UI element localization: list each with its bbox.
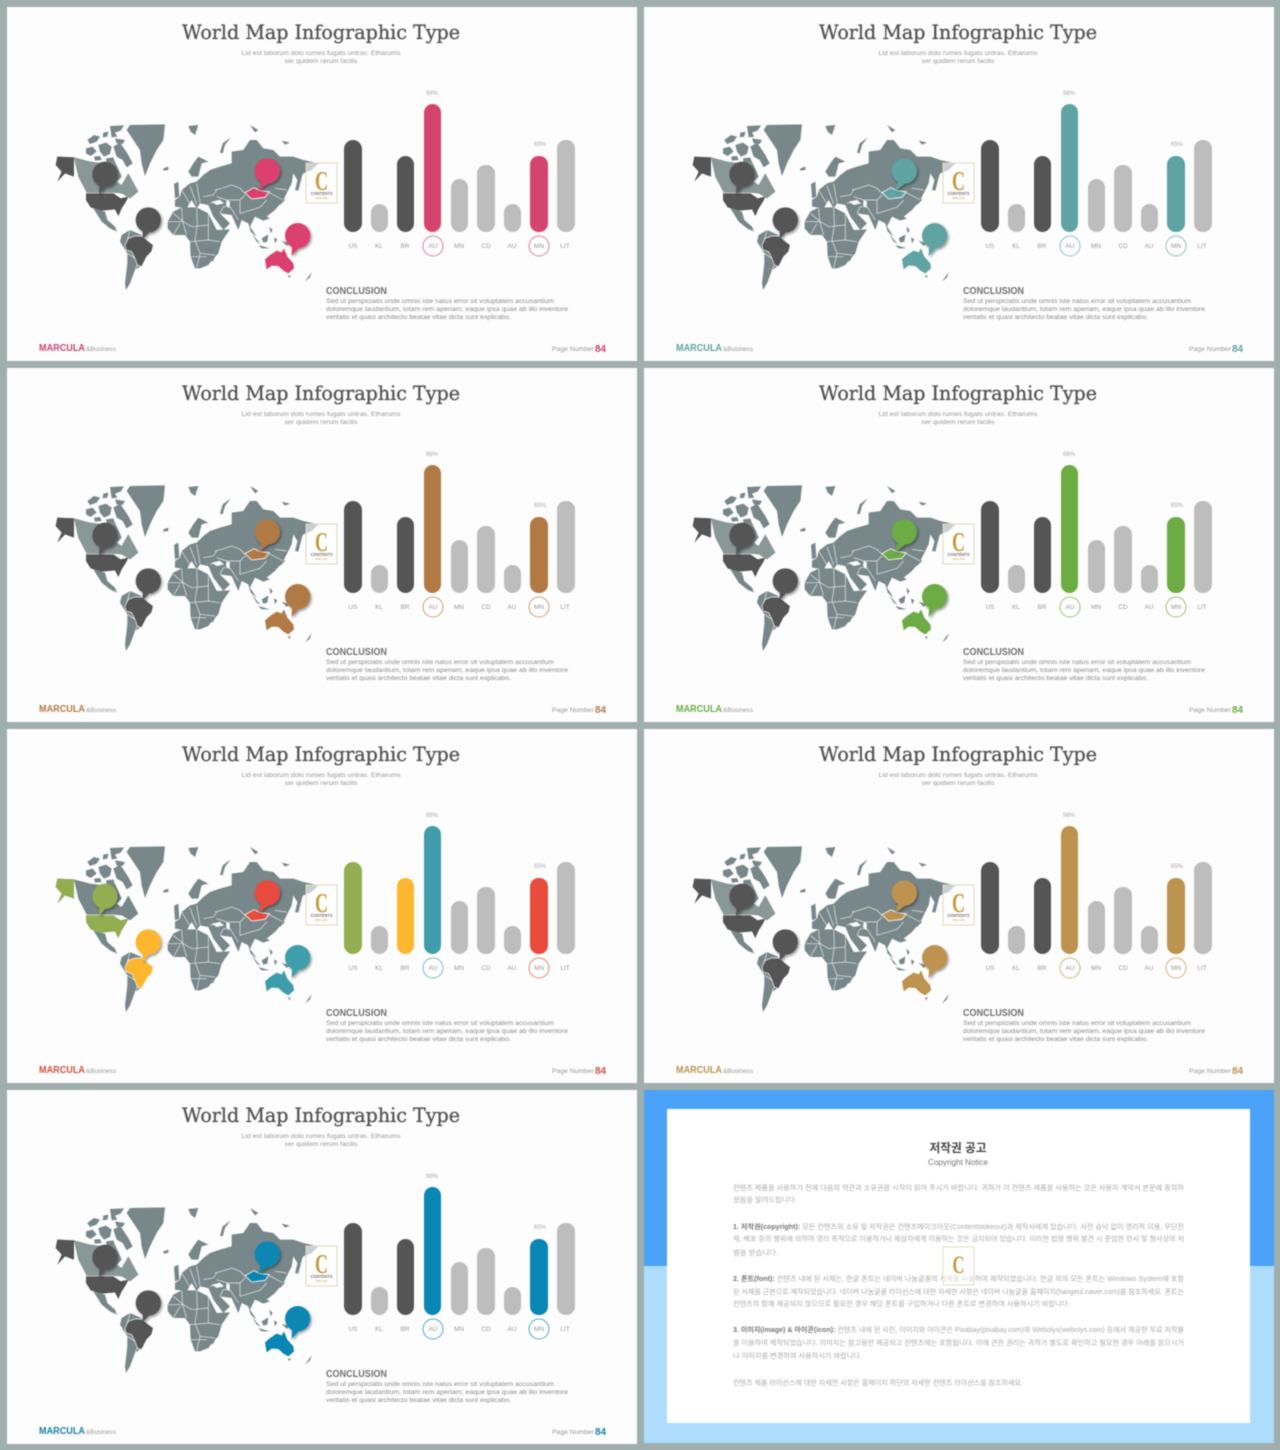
bar chart: CD xyxy=(481,965,491,972)
footer brand: &Business xyxy=(723,708,753,714)
footer brand: &Business xyxy=(86,1430,116,1436)
bar chart xyxy=(344,452,575,617)
bar chart: 98% xyxy=(426,813,439,819)
title: World Map Infographic Type xyxy=(182,381,460,405)
bar chart: AU xyxy=(1066,965,1075,972)
subtitle: ser quidem rerum facilis xyxy=(284,780,358,787)
bar chart: US xyxy=(349,965,357,972)
subtitle: ser quidem rerum facilis xyxy=(922,419,994,426)
bar chart xyxy=(344,91,575,256)
logo watermark xyxy=(943,163,974,203)
footer brand xyxy=(39,704,116,715)
bar chart: US xyxy=(986,965,994,972)
panel: pink slide xyxy=(7,7,637,361)
panel: copyright notice xyxy=(644,1090,1274,1443)
page number: 84 xyxy=(595,1427,607,1438)
bar chart xyxy=(344,1174,575,1339)
page number: 84 xyxy=(1232,1066,1244,1077)
footer brand: &Business xyxy=(86,1069,116,1075)
bar chart: US xyxy=(986,243,994,250)
conclusion: doloremque laudantium, totam rem aperiam, eaque ipsa quae ab illo inventore xyxy=(326,306,568,313)
title: World Map Infographic Type xyxy=(182,1103,460,1127)
bar chart: BR xyxy=(401,243,410,250)
subtitle: ser quidem rerum facilis xyxy=(922,780,994,787)
bar chart: CD xyxy=(481,243,491,250)
title: World Map Infographic Type xyxy=(819,381,1097,405)
subtitle: ser quidem rerum facilis xyxy=(284,1141,358,1148)
subtitle: ser quidem rerum facilis xyxy=(284,58,358,65)
conclusion xyxy=(326,286,568,321)
bar chart: AU xyxy=(508,1326,517,1333)
logo watermark xyxy=(943,1247,974,1285)
conclusion: Sed ut perspiciatis unde omnis iste natus error sit voluptatem accusantium xyxy=(963,298,1192,305)
copyright body text: 된 서체를 근본으로 제작되었습니다. 네이버 나눔글꼴 라이선스에 대한 자세한 사항은 네이버 나눔글꼴 홈페이지(hangeul.naver.com)를 참조하세요. 폰트는 xyxy=(733,1287,1185,1296)
conclusion: Sed ut perspiciatis unde omnis iste natus error sit voluptatem accusantium xyxy=(963,659,1192,666)
copyright body text: 셨음을 알려드립니다. xyxy=(733,1195,797,1204)
bar chart: MN xyxy=(1091,965,1101,972)
subtitle: Lid est laborum dolo rumes fugats untras. Etharums xyxy=(878,772,1038,779)
conclusion xyxy=(326,1369,568,1404)
page number: 84 xyxy=(595,344,607,355)
bar chart xyxy=(981,813,1212,978)
conclusion: veritatis et quasi architecto beatae vitae dicta sunt explicabo. xyxy=(326,314,511,321)
footer brand: MARCULA xyxy=(676,1065,722,1076)
conclusion: doloremque laudantium, totam rem aperiam, eaque ipsa quae ab illo inventore xyxy=(326,1028,568,1035)
bar chart: 98% xyxy=(1063,813,1076,819)
title: World Map Infographic Type xyxy=(819,742,1097,766)
conclusion: CONCLUSION xyxy=(963,286,1024,297)
copyright body text xyxy=(733,1183,1185,1387)
bar chart: 98% xyxy=(426,452,439,458)
bar chart: AU xyxy=(1145,604,1154,611)
bar chart: 65% xyxy=(1171,864,1184,870)
footer brand xyxy=(39,1065,116,1076)
subtitle xyxy=(878,50,1038,65)
bar chart: MN xyxy=(454,1326,464,1333)
panel: teal slide xyxy=(644,7,1274,361)
bar chart: KL xyxy=(1012,604,1020,611)
conclusion: Sed ut perspiciatis unde omnis iste natus error sit voluptatem accusantium xyxy=(963,1020,1192,1027)
panel: brown slide xyxy=(7,368,637,722)
page number: Page Number xyxy=(552,708,594,714)
world map xyxy=(56,485,318,651)
panel: multicolor slide xyxy=(7,729,637,1083)
copyright body text: 벌을 받습니다. xyxy=(733,1248,778,1257)
conclusion: doloremque laudantium, totam rem aperiam, eaque ipsa quae ab illo inventore xyxy=(963,306,1205,313)
bar chart: AU xyxy=(1066,604,1075,611)
page number xyxy=(1189,344,1244,355)
footer brand: &Business xyxy=(86,347,116,353)
bar chart: 65% xyxy=(534,1225,547,1231)
bar chart: AU xyxy=(429,1326,438,1333)
page number xyxy=(1189,1066,1244,1077)
conclusion xyxy=(963,647,1205,682)
footer brand xyxy=(676,1065,753,1076)
page number: 84 xyxy=(1232,705,1244,716)
bar chart: US xyxy=(349,243,357,250)
bar chart: US xyxy=(986,604,994,611)
panel: tan slide xyxy=(644,729,1274,1083)
bar chart: BR xyxy=(401,1326,410,1333)
conclusion xyxy=(326,1008,568,1043)
copyright body text: 1. 저작권(copyright): 모든 컨텐츠의 소유 및 저작권은 컨텐츠메이크아웃(Contentstokeout)과 제작사에게 있습니다. 사전 승낙 없이 영리적 이용, 무단전 xyxy=(733,1222,1184,1231)
conclusion xyxy=(963,1008,1205,1043)
subtitle: Lid est laborum dolo rumes fugats untras. Etharums xyxy=(242,772,400,779)
subtitle xyxy=(242,411,400,426)
bar chart: KL xyxy=(375,604,383,611)
world map xyxy=(56,124,318,290)
panel: blue slide xyxy=(7,1090,637,1444)
logo watermark xyxy=(306,524,337,564)
conclusion: veritatis et quasi architecto beatae vitae dicta sunt explicabo. xyxy=(326,1036,511,1043)
bar chart: US xyxy=(349,1326,357,1333)
page number: Page Number xyxy=(552,347,594,353)
bar chart: 98% xyxy=(426,1174,439,1180)
world map xyxy=(56,1207,318,1373)
bar chart: 65% xyxy=(534,142,547,148)
bar chart: 65% xyxy=(534,503,547,509)
bar chart: BR xyxy=(1038,604,1047,611)
subtitle xyxy=(878,772,1038,787)
bar chart: CD xyxy=(481,604,491,611)
bar chart: CD xyxy=(481,1326,491,1333)
copyright heading: 저작권 공고 xyxy=(930,1140,986,1155)
bar chart: CD xyxy=(1118,604,1128,611)
footer brand xyxy=(676,704,753,715)
bar chart: MN xyxy=(454,965,464,972)
logo watermark: C xyxy=(952,1252,964,1279)
conclusion: Sed ut perspiciatis unde omnis iste natus error sit voluptatem accusantium xyxy=(326,1020,555,1027)
subtitle: Lid est laborum dolo rumes fugats untras. Etharums xyxy=(242,1133,400,1140)
footer brand: &Business xyxy=(86,708,116,714)
bar chart: MN xyxy=(454,243,464,250)
bar chart: MN xyxy=(1091,604,1101,611)
bar chart: KL xyxy=(1012,965,1020,972)
bar chart: KL xyxy=(375,1326,383,1333)
subtitle: ser quidem rerum facilis xyxy=(284,419,358,426)
bar chart: KL xyxy=(375,965,383,972)
bar chart: MN xyxy=(534,243,544,250)
conclusion: doloremque laudantium, totam rem aperiam, eaque ipsa quae ab illo inventore xyxy=(963,1028,1205,1035)
conclusion xyxy=(326,647,568,682)
bar chart: MN xyxy=(1091,243,1101,250)
page number: Page Number xyxy=(552,1069,594,1075)
bar chart: LIT xyxy=(1197,243,1207,250)
bar chart: LIT xyxy=(560,965,570,972)
copyright body text: 3. 이미지(image) & 아이콘(icon): 컨텐츠 내에 된 사진, 이미지와 아이콘은 Pixabay(pixabay.com)와 Webolys(webolys.com) 등에서 제공한 무료 저작물 xyxy=(733,1325,1185,1334)
title: World Map Infographic Type xyxy=(819,20,1097,44)
bar chart: AU xyxy=(508,243,517,250)
bar chart: KL xyxy=(1012,243,1020,250)
conclusion: Sed ut perspiciatis unde omnis iste natus error sit voluptatem accusantium xyxy=(326,659,555,666)
bar chart xyxy=(981,452,1212,617)
page number: Page Number xyxy=(1189,1069,1231,1075)
bar chart: MN xyxy=(534,1326,544,1333)
bar chart: BR xyxy=(401,604,410,611)
logo watermark xyxy=(943,885,974,925)
bar chart: MN xyxy=(534,604,544,611)
bar chart: MN xyxy=(534,965,544,972)
footer brand: MARCULA xyxy=(39,343,85,354)
conclusion: CONCLUSION xyxy=(326,1008,387,1019)
bar chart: AU xyxy=(1145,243,1154,250)
conclusion: Sed ut perspiciatis unde omnis iste natus error sit voluptatem accusantium xyxy=(326,298,555,305)
footer brand: &Business xyxy=(723,347,753,353)
bar chart: LIT xyxy=(1197,604,1207,611)
bar chart: CD xyxy=(1118,243,1128,250)
subtitle: Lid est laborum dolo rumes fugats untras. Etharums xyxy=(878,411,1038,418)
conclusion: CONCLUSION xyxy=(326,647,387,658)
copyright body text: 나 이미지를 변경하여 사용하시기 바랍니다. xyxy=(733,1351,862,1360)
copyright body text: 컨텐츠의 함께 제공되지 않으므로 필요한 경우 해당 폰트를 구입하거나 다른 폰트로 변경하여 사용하시기 바랍니다. xyxy=(733,1299,1070,1308)
panel: green slide xyxy=(644,368,1274,722)
page number xyxy=(552,1427,607,1438)
conclusion: CONCLUSION xyxy=(326,1369,387,1380)
conclusion: veritatis et quasi architecto beatae vitae dicta sunt explicabo. xyxy=(326,1397,511,1404)
bar chart: 65% xyxy=(534,864,547,870)
footer brand xyxy=(39,343,116,354)
subtitle: Lid est laborum dolo rumes fugats untras. Etharums xyxy=(242,50,400,57)
copyright subheading: Copyright Notice xyxy=(928,1158,989,1167)
footer brand xyxy=(39,1426,116,1437)
page number: 84 xyxy=(1232,344,1244,355)
footer brand: &Business xyxy=(723,1069,753,1075)
copyright body text: 컨텐츠 제품 라이선스에 대한 자세한 사항은 홈페이지 하단의 자세한 컨텐츠 라이선스를 참조하세요. xyxy=(733,1378,1023,1387)
logo watermark xyxy=(943,524,974,564)
logo watermark xyxy=(306,1246,337,1286)
page number xyxy=(552,344,607,355)
title: World Map Infographic Type xyxy=(182,20,460,44)
world map xyxy=(693,485,955,651)
bar chart: MN xyxy=(454,604,464,611)
bar chart: 98% xyxy=(1063,452,1076,458)
footer brand xyxy=(676,343,753,354)
bar chart: AU xyxy=(429,604,438,611)
subtitle xyxy=(878,411,1038,426)
subtitle: Lid est laborum dolo rumes fugats untras. Etharums xyxy=(878,50,1038,57)
bar chart: MN xyxy=(1171,604,1181,611)
subtitle xyxy=(242,772,400,787)
bar chart: US xyxy=(349,604,357,611)
page number: 84 xyxy=(595,1066,607,1077)
bar chart: AU xyxy=(429,243,438,250)
bar chart: LIT xyxy=(1197,965,1207,972)
bar chart: 98% xyxy=(1063,91,1076,97)
bar chart xyxy=(981,91,1212,256)
world map xyxy=(56,846,318,1012)
conclusion xyxy=(963,286,1205,321)
conclusion: doloremque laudantium, totam rem aperiam, eaque ipsa quae ab illo inventore xyxy=(326,667,568,674)
logo watermark xyxy=(306,885,337,925)
bar chart: AU xyxy=(1066,243,1075,250)
bar chart: BR xyxy=(1038,965,1047,972)
conclusion: Sed ut perspiciatis unde omnis iste natus error sit voluptatem accusantium xyxy=(326,1381,555,1388)
bar chart: KL xyxy=(375,243,383,250)
logo watermark xyxy=(306,163,337,203)
subtitle: Lid est laborum dolo rumes fugats untras. Etharums xyxy=(242,411,400,418)
copyright body text: 2. 폰트(font): 컨텐츠 내에 된 서체는, 한글 폰트는 네이버 나눔글꼴의 서체를 사용하여 제작되었습니다. 한글 외의 모든 폰트는 Windows System에 포함 xyxy=(733,1274,1185,1283)
subtitle xyxy=(242,1133,400,1148)
footer brand: MARCULA xyxy=(676,343,722,354)
page number xyxy=(552,1066,607,1077)
bar chart: LIT xyxy=(560,604,570,611)
conclusion: veritatis et quasi architecto beatae vitae dicta sunt explicabo. xyxy=(326,675,511,682)
bar chart: AU xyxy=(1145,965,1154,972)
bar chart: BR xyxy=(401,965,410,972)
copyright body text: 을 이용하여 제작되었습니다. 이미지는 참고용만 제공되고 컨텐츠에는 포함됩니다. 이에 관한 권리는 귀하가 별도로 확인하고 필요한 경우 아래를 읽으시거 xyxy=(733,1338,1184,1347)
bar chart: AU xyxy=(508,965,517,972)
bar chart: 98% xyxy=(426,91,439,97)
world map xyxy=(693,846,955,1012)
bar chart: 65% xyxy=(1171,503,1184,509)
page number: Page Number xyxy=(1189,708,1231,714)
footer brand: MARCULA xyxy=(39,1065,85,1076)
bar chart: AU xyxy=(429,965,438,972)
subtitle xyxy=(242,50,400,65)
world map xyxy=(693,124,955,290)
page number: Page Number xyxy=(1189,347,1231,353)
conclusion: doloremque laudantium, totam rem aperiam, eaque ipsa quae ab illo inventore xyxy=(963,667,1205,674)
conclusion: veritatis et quasi architecto beatae vitae dicta sunt explicabo. xyxy=(963,1036,1148,1043)
conclusion: CONCLUSION xyxy=(326,286,387,297)
page number: 84 xyxy=(595,705,607,716)
conclusion: doloremque laudantium, totam rem aperiam, eaque ipsa quae ab illo inventore xyxy=(326,1389,568,1396)
bar chart: MN xyxy=(1171,965,1181,972)
copyright body text: 재, 배포 등의 행위에 의하여 영리 목적으로 이용하거나 제삼자에게 이용하는 것은 금지되어 있습니다. 이러한 법령 행위 발견 시 준엄한 민사 및 형사상의 처 xyxy=(733,1234,1184,1243)
bar chart: LIT xyxy=(560,243,570,250)
footer brand: MARCULA xyxy=(39,704,85,715)
copyright body text: 컨텐츠 제품을 사용하기 전에 다음의 약관과 소유권을 시작이 읽어 주시기 바랍니다. 귀하가 이 컨텐츠 제품을 사용하는 것은 사용자 계약서 본문에 동의하 xyxy=(733,1183,1185,1192)
page number: Page Number xyxy=(552,1430,594,1436)
bar chart: MN xyxy=(1171,243,1181,250)
subtitle: ser quidem rerum facilis xyxy=(922,58,994,65)
bar chart: BR xyxy=(1038,243,1047,250)
bar chart: CD xyxy=(1118,965,1128,972)
page number xyxy=(552,705,607,716)
bar chart xyxy=(344,813,575,978)
conclusion: CONCLUSION xyxy=(963,1008,1024,1019)
bar chart: 65% xyxy=(1171,142,1184,148)
bar chart: LIT xyxy=(560,1326,570,1333)
conclusion: veritatis et quasi architecto beatae vitae dicta sunt explicabo. xyxy=(963,314,1148,321)
footer brand: MARCULA xyxy=(676,704,722,715)
conclusion: CONCLUSION xyxy=(963,647,1024,658)
bar chart: AU xyxy=(508,604,517,611)
conclusion: veritatis et quasi architecto beatae vitae dicta sunt explicabo. xyxy=(963,675,1148,682)
footer brand: MARCULA xyxy=(39,1426,85,1437)
page number xyxy=(1189,705,1244,716)
title: World Map Infographic Type xyxy=(182,742,460,766)
